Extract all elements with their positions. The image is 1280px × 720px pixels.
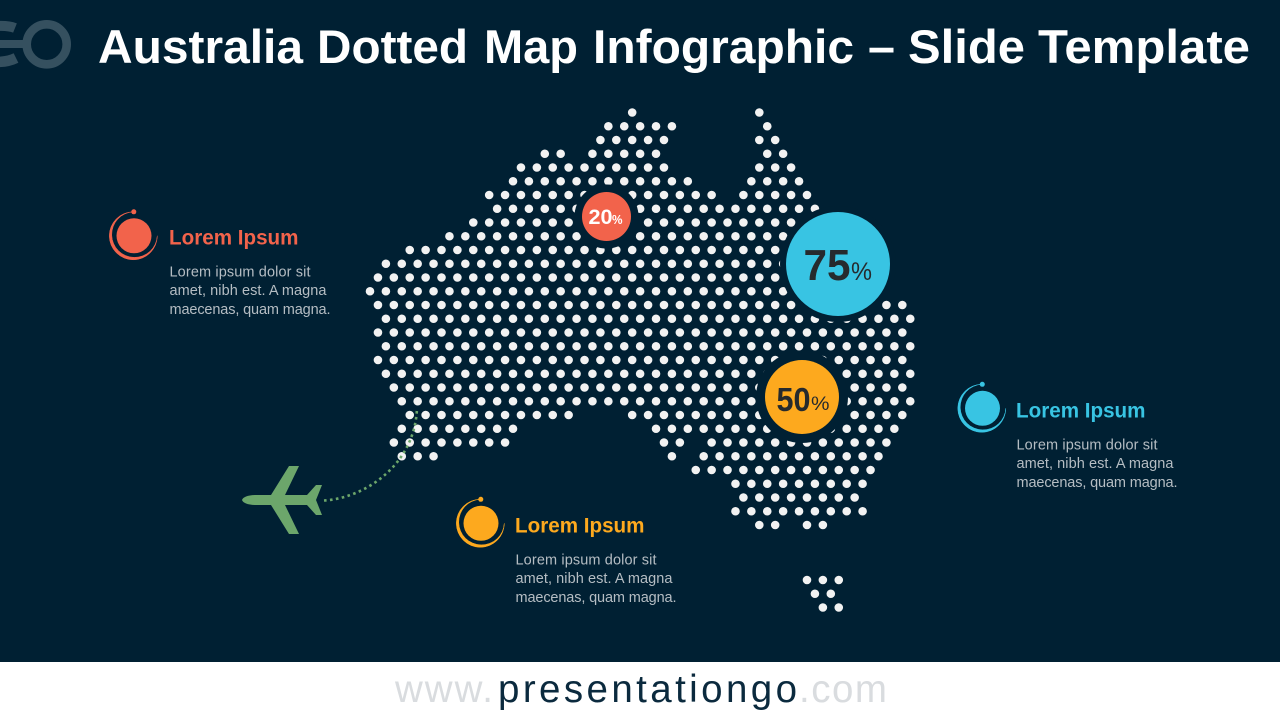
badge: 50 percent: % [811,394,830,415]
flight path [324,408,417,500]
logo fragment [0,24,67,64]
footer band [0,662,1280,720]
title: – [868,20,895,73]
badge: 75 percent: % [851,258,872,286]
text block: orange: maecenas, quam magna. [516,590,676,606]
text block: red: amet, nibh est. A magna [170,283,327,299]
icon: blue orbit dot [958,382,1006,432]
footer url [394,668,887,711]
badge: 75 percent [780,206,896,322]
badge: 75 percent: 75 [804,241,850,290]
title: Australia [98,20,304,73]
title [98,20,1250,73]
heading: red: Lorem Ipsum [169,227,298,250]
text block: orange [516,552,676,606]
badge: 20 percent [574,184,638,248]
callout: orange [456,497,676,606]
heading: orange: Lorem Ipsum [515,515,644,538]
badge: 20 percent: % [612,212,623,227]
footer url: presentationgo [498,668,797,711]
text block: blue: maecenas, quam magna. [1016,475,1178,491]
icon: airplane [242,466,322,534]
text block: orange: amet, nibh est. A magna [516,571,673,587]
icon: red orbit dot [109,209,157,260]
callout: red [109,209,330,318]
footer url: www. [394,668,493,711]
title: Infographic [593,20,854,73]
title: Slide [908,20,1025,73]
icon: orange orbit dot [456,497,504,547]
badge: 50 percent: 50 [776,381,810,418]
badge: 50 percent [756,351,848,443]
text block: blue [1016,437,1178,491]
callout: blue [958,382,1178,491]
title: Map [484,20,578,73]
text block: red: Lorem ipsum dolor sit [170,264,310,280]
text block: blue: amet, nibh est. A magna [1016,456,1174,472]
title: Template [1038,20,1250,73]
text block: orange: Lorem ipsum dolor sit [516,552,656,568]
dotted map of Australia [370,112,910,608]
text block: red: maecenas, quam magna. [170,302,330,318]
text block: red [170,264,330,318]
heading: blue: Lorem Ipsum [1016,400,1146,423]
badge: 20 percent: 20 [588,205,613,229]
text block: blue: Lorem ipsum dolor sit [1016,437,1158,453]
footer url: .com [799,668,887,711]
title: Dotted [317,20,468,73]
